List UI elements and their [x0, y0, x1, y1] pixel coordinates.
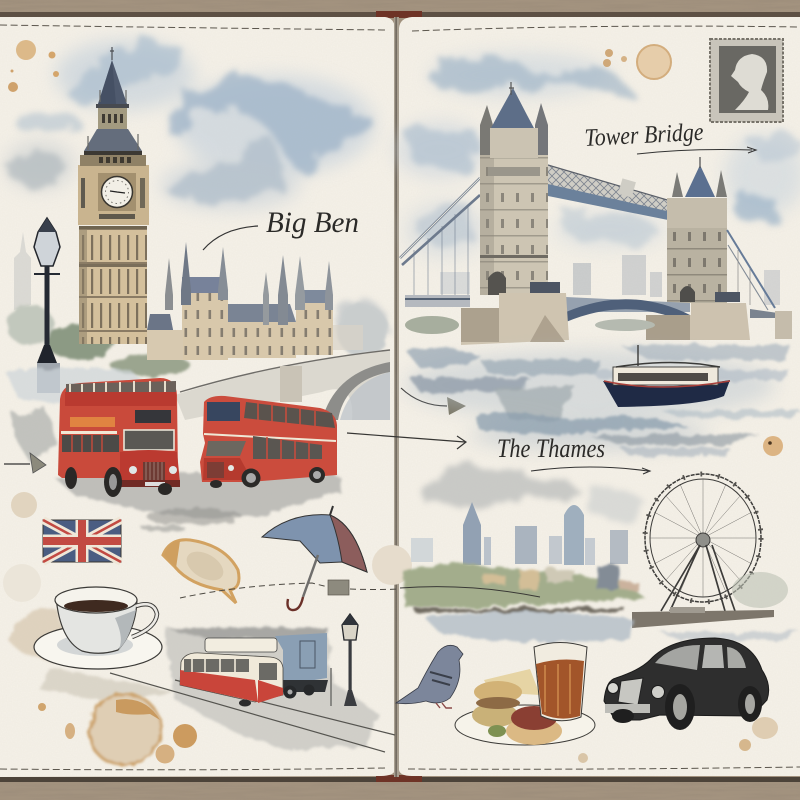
- Tower Bridge label: Tower Bridge: [584, 119, 704, 152]
- red and cream tram: [180, 653, 283, 706]
- coffee stain center: [163, 540, 239, 603]
- trees beside Big Ben: [6, 304, 388, 376]
- second street lamp: [331, 614, 358, 706]
- umbrella: [262, 506, 367, 610]
- clouds above lower skyline: [420, 464, 648, 528]
- left bridge tower: [480, 82, 548, 295]
- Houses of Parliament: [147, 242, 363, 360]
- background skyline right: [440, 255, 780, 305]
- lower river wash: [415, 608, 800, 642]
- spire: [98, 47, 127, 104]
- dashed route and envelope: [180, 580, 400, 598]
- red double-decker bus (side): [200, 396, 337, 488]
- Union Jack flag: [43, 520, 121, 562]
- coffee ring top right: [603, 45, 671, 79]
- City skyline: [411, 502, 628, 565]
- bridge piers: [405, 282, 792, 345]
- Westminster bridge: [175, 350, 390, 420]
- belfry: [96, 104, 129, 130]
- clock stage: [78, 155, 149, 225]
- plate of food: [455, 669, 595, 745]
- tram road lines: [110, 673, 395, 752]
- watercolor sky: right page: [395, 53, 800, 258]
- London Eye pier: [632, 572, 788, 628]
- route line over the bank: [400, 587, 540, 597]
- tea cup and saucer: [8, 587, 162, 669]
- Big Ben clock tower: [78, 47, 149, 344]
- glass of beer: [534, 642, 587, 721]
- suspension cables right: [727, 230, 775, 310]
- The Thames label: The Thames: [497, 434, 605, 463]
- suspension cables left: [400, 178, 480, 296]
- arrow with triangle head: [401, 388, 466, 415]
- road shadow under buses: [55, 472, 340, 531]
- long arrow to The Thames: [347, 433, 466, 449]
- street wash under tram: [40, 627, 380, 750]
- green riverbank: [404, 564, 645, 608]
- low bridge deck: [405, 295, 778, 325]
- lower roof: [84, 129, 142, 151]
- London Eye ferris wheel: [645, 474, 761, 611]
- skyline behind lamp post: [14, 232, 31, 310]
- blue truck: [205, 633, 328, 698]
- coffee splatters bottom right: [578, 436, 783, 763]
- pigeon: [396, 645, 463, 708]
- postage stamp: [710, 39, 783, 122]
- watercolor sky: left page: [5, 40, 386, 340]
- Big Ben label and pointer: [203, 206, 359, 250]
- right bridge tower: [667, 157, 727, 303]
- small left arrow: [4, 453, 46, 473]
- street lamp: [34, 218, 60, 393]
- Big Ben label and pointer: Big Ben: [266, 206, 359, 239]
- Thames water: [405, 345, 800, 456]
- red double-decker bus (front): [58, 378, 180, 497]
- coffee splatters top left: [8, 40, 59, 92]
- tour boat: [603, 345, 730, 407]
- black taxi cab: [604, 638, 769, 730]
- coffee rings bottom left: [3, 492, 412, 766]
- tower shaft: [79, 226, 147, 344]
- The Thames label: [497, 434, 650, 474]
- river wash under lamp: [5, 368, 165, 462]
- roof finials: [88, 90, 138, 150]
- upper walkway: [548, 165, 702, 226]
